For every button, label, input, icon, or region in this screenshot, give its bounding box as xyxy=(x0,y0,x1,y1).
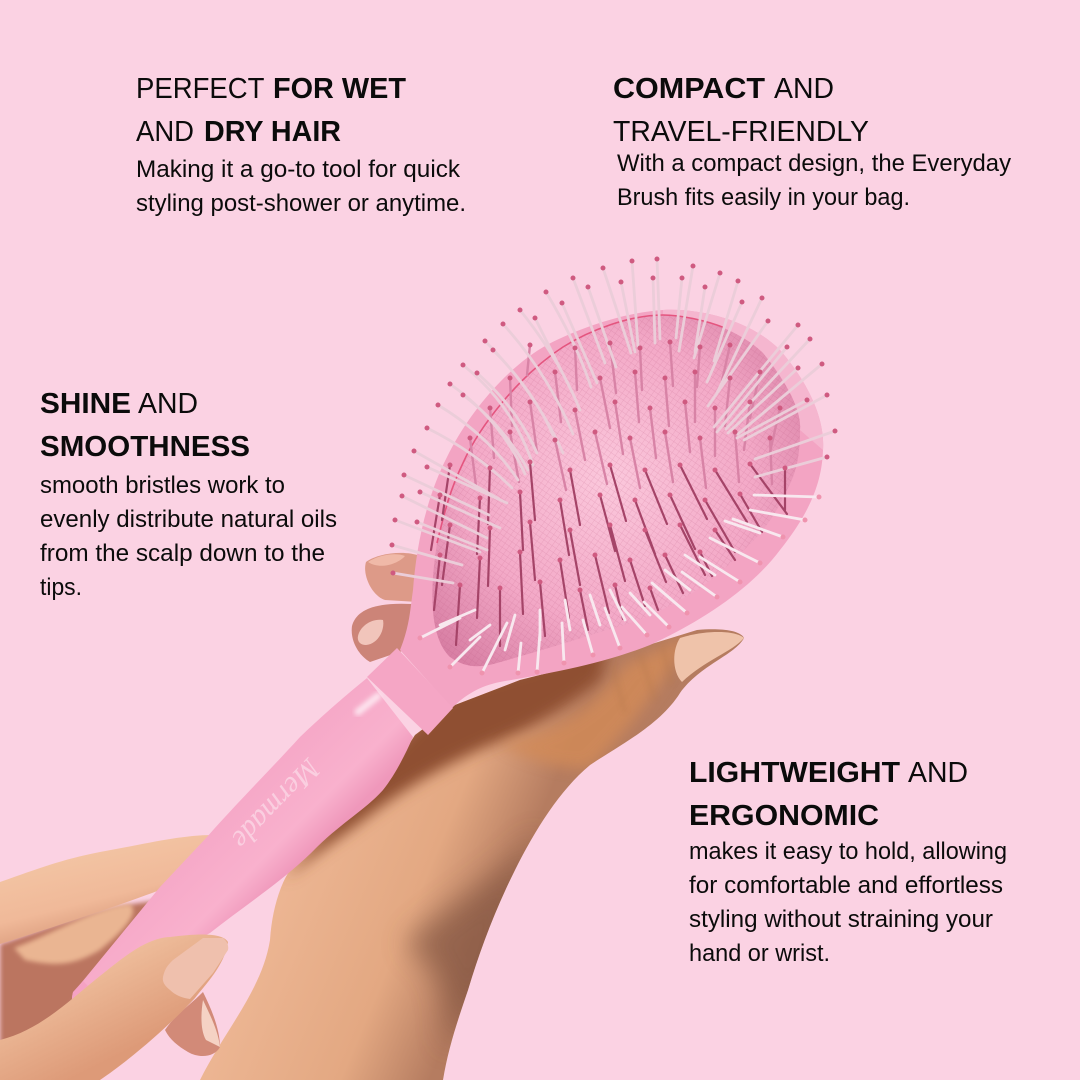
heading line two: SMOOTHNESS xyxy=(40,431,250,463)
hand: back fingers xyxy=(0,900,220,1075)
body line three: from the scalp down to the xyxy=(40,540,325,567)
heading line two: TRAVEL-FRIENDLY xyxy=(613,116,869,148)
heading: AND xyxy=(774,73,834,105)
brush collar xyxy=(367,648,453,735)
bristle tips light xyxy=(420,497,819,673)
bristle tips dark xyxy=(392,259,835,590)
heading: AND xyxy=(138,388,198,420)
thumb nail xyxy=(163,938,228,999)
hand: thumb in front of handle xyxy=(0,935,228,1080)
outer bristles upper and side xyxy=(392,259,835,583)
brush handle xyxy=(72,678,413,1012)
heading: AND xyxy=(908,757,968,789)
body line two: evenly distribute natural oils xyxy=(40,506,337,533)
hand: fingers behind brush head xyxy=(352,553,420,662)
feature: compact and travel-friendly xyxy=(613,73,1011,211)
heading line two: DRY HAIR xyxy=(204,116,341,148)
inner bristles upper xyxy=(470,342,780,490)
brush head xyxy=(392,259,835,708)
handle highlight xyxy=(358,696,378,712)
heading: FOR WET xyxy=(273,73,406,105)
feature: shine and smoothness xyxy=(40,388,337,601)
brush xyxy=(72,259,835,1012)
body line four: tips. xyxy=(40,574,82,601)
hand: palm and finger holding brush xyxy=(190,620,760,1080)
heading: LIGHTWEIGHT xyxy=(689,757,900,789)
body line three: styling without straining your xyxy=(689,906,993,933)
heading line two: AND xyxy=(136,116,194,148)
hand: index finger xyxy=(0,835,212,944)
body line two: styling post-shower or anytime. xyxy=(136,190,466,217)
heading line two: ERGONOMIC xyxy=(689,800,879,832)
body line one: smooth bristles work to xyxy=(40,472,285,499)
inner bristles lower xyxy=(431,462,787,646)
brush logo script: Mermade xyxy=(225,751,327,856)
brush basin xyxy=(432,315,800,666)
heading: COMPACT xyxy=(613,73,765,105)
heading: SHINE xyxy=(40,388,131,420)
body line one: With a compact design, the Everyday xyxy=(617,150,1011,177)
feature: wet and dry hair xyxy=(136,73,466,217)
body line one: Making it a go-to tool for quick xyxy=(136,156,461,183)
body line one: makes it easy to hold, allowing xyxy=(689,838,1007,865)
heading: PERFECT xyxy=(136,73,265,105)
body line two: for comfortable and effortless xyxy=(689,872,1003,899)
feature: lightweight and ergonomic xyxy=(689,757,1007,967)
body line two: Brush fits easily in your bag. xyxy=(617,184,910,211)
outer bristles lower white xyxy=(420,495,819,673)
photo: hands holding brush xyxy=(0,553,760,1080)
basin mesh texture xyxy=(432,315,800,666)
body line four: hand or wrist. xyxy=(689,940,830,967)
basin pink seam xyxy=(437,315,725,543)
brush handle end cap xyxy=(72,981,97,1012)
